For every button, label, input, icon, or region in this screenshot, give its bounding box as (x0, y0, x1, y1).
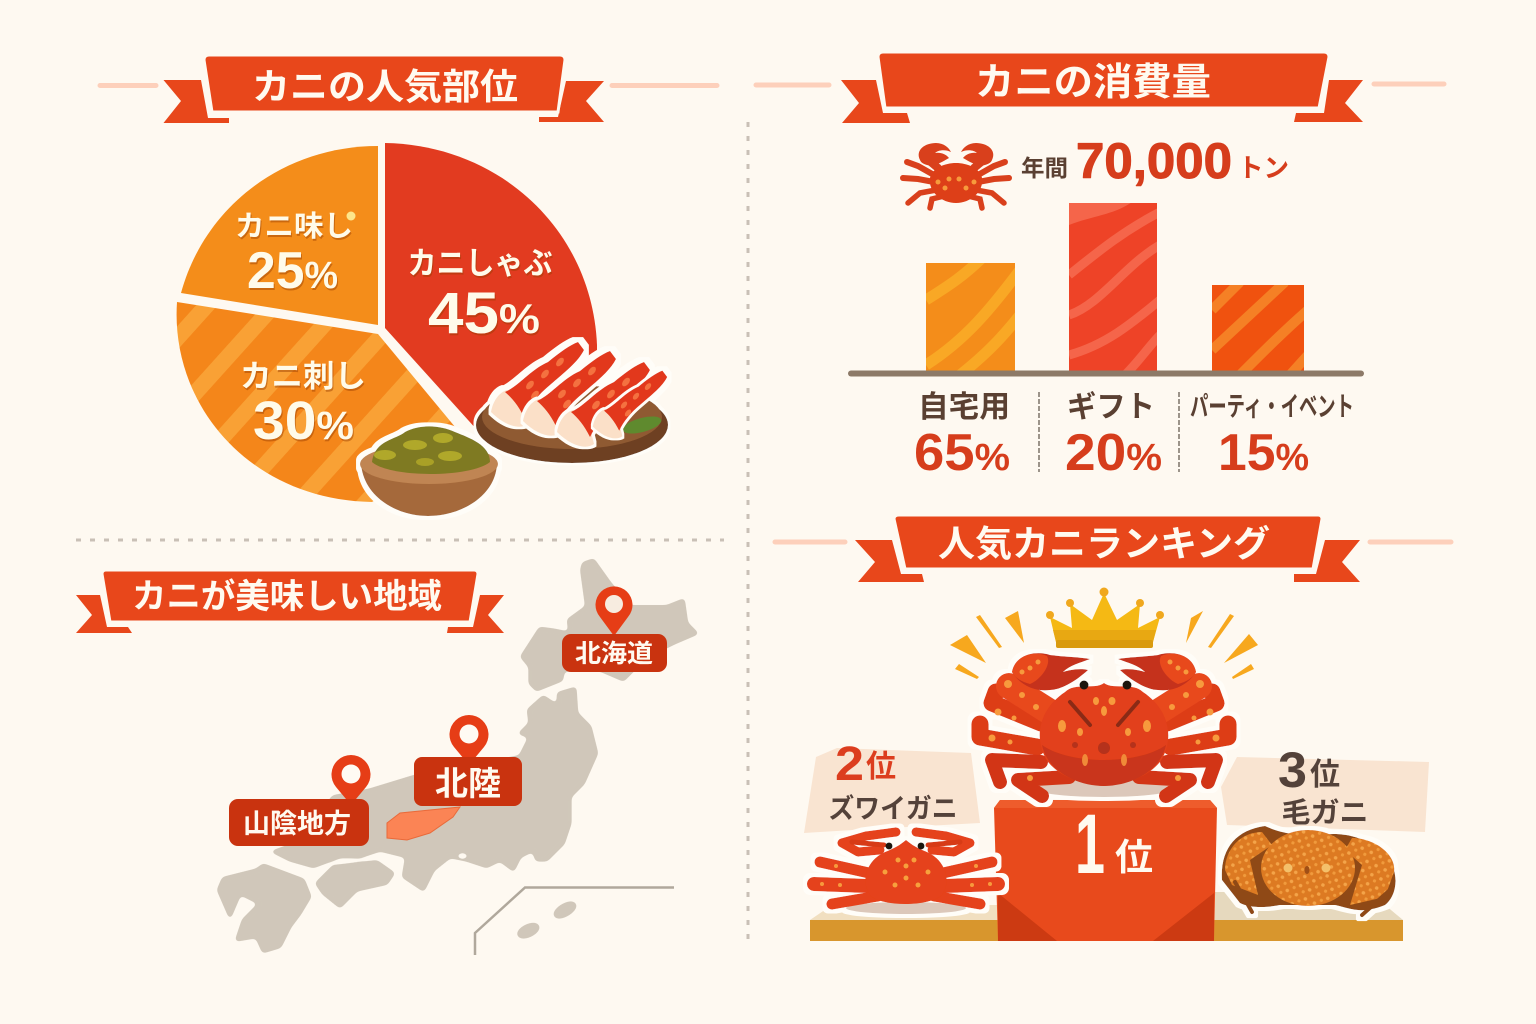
crab: 2nd place ズワイガニ (814, 832, 998, 914)
heading: カニの消費量 (756, 52, 1444, 123)
annual total: 年間 70,000トン: 年間 (1021, 155, 1068, 181)
label: 自宅用 65% (914, 391, 1010, 482)
label: カニ刺し 30% (240, 359, 366, 451)
panel: 2nd place plate: ズワイガニ (828, 793, 958, 824)
panel: 3rd place plate: 位 (1310, 757, 1340, 792)
label: ギフト 20% (1065, 391, 1162, 482)
pin: 北海道: 北海道 (575, 640, 653, 668)
panel: 3rd place plate: 毛ガニ (1282, 797, 1368, 828)
annual total: 年間 70,000トン: 70,000 (1076, 133, 1232, 189)
map: Okinawa inset line (475, 888, 674, 955)
podium: 1st place (994, 797, 1217, 941)
podium: 1st place: 1 (1075, 797, 1105, 891)
icon: small crab (903, 143, 1009, 208)
label: パーティ・イベント 15%: パーティ・イベント (1190, 392, 1354, 422)
heading: カニが美味しい地域 (76, 570, 504, 633)
label: パーティ・イベント 15% (1190, 392, 1354, 482)
pin: 北陸: 北陸 (435, 765, 501, 802)
panel: 2nd place plate: 2 (835, 738, 864, 791)
crab: 1st place (980, 653, 1228, 797)
pie slice: カニ刺し 30% (177, 302, 470, 502)
label: ギフト 20%: ギフト (1067, 391, 1155, 424)
axis (851, 370, 1361, 376)
heading: カニの人気部位 (100, 55, 717, 123)
heading: カニの消費量: カニの消費量 (975, 62, 1211, 104)
label: パーティ・イベント 15%: 15% (1218, 424, 1309, 482)
label: カニしゃぶ 45%: カニしゃぶ (408, 246, 552, 281)
bar: 自宅用 (926, 263, 1015, 370)
panel: popular parts pie chart (177, 143, 597, 502)
icon: radiating rays (950, 611, 1258, 679)
label: カニしゃぶ 45% (408, 246, 552, 346)
label: カニ味し 25% (235, 210, 356, 300)
heading: 人気カニランキング (775, 515, 1451, 582)
podium: 1st place: 位 (1115, 837, 1153, 878)
bar chart: consumption (851, 200, 1361, 375)
panel: 2nd place plate: 位 (866, 749, 896, 784)
pin: 北海道 (562, 586, 667, 672)
pie slice: カニしゃぶ 45% (385, 143, 597, 441)
panel: 3rd place plate (1221, 742, 1429, 832)
pin: 山陰地方: 山陰地方 (243, 809, 351, 839)
panel: 3rd place plate: 3 (1278, 742, 1307, 798)
map: Japan islands (218, 560, 697, 952)
panel: map of Japan (218, 560, 697, 955)
podium: 2nd place base (810, 905, 998, 941)
heading: 人気カニランキング: 人気カニランキング (938, 523, 1270, 564)
icon: crown (1046, 588, 1164, 648)
label: 自宅用 65%: 自宅用 (918, 391, 1010, 424)
annual total: 年間 70,000トン (1021, 133, 1289, 189)
label: カニ刺し 30%: カニ刺し (240, 359, 366, 394)
label: カニ味し 25%: 25% (247, 242, 338, 300)
bar: ギフト (1069, 200, 1160, 375)
pin: 北陸 (414, 715, 522, 806)
label: カニ刺し 30%: 30% (253, 391, 354, 451)
heading: カニが美味しい地域: カニが美味しい地域 (132, 577, 442, 616)
label: 自宅用 65%: 65% (914, 424, 1010, 482)
annual total: 年間 70,000トン: トン (1238, 153, 1289, 183)
map: highlighted crab region (387, 807, 460, 840)
bar: パーティ・イベント (1212, 285, 1304, 370)
label: カニしゃぶ 45%: 45% (428, 281, 540, 346)
label: カニ味し 25%: カニ味し (235, 210, 353, 243)
pie slice: カニ味し 25% (181, 146, 378, 325)
podium: 3rd place base (1214, 892, 1403, 941)
heading: カニの人気部位: カニの人気部位 (252, 66, 518, 107)
icon: plate of crab legs (476, 342, 668, 463)
panel: 2nd place plate (804, 738, 980, 833)
label: ギフト 20%: 20% (1065, 424, 1162, 482)
crab: 3rd place 毛ガニ (1222, 826, 1396, 915)
pin: 山陰地方 (229, 755, 370, 846)
icon: bowl of crab miso (360, 426, 498, 516)
